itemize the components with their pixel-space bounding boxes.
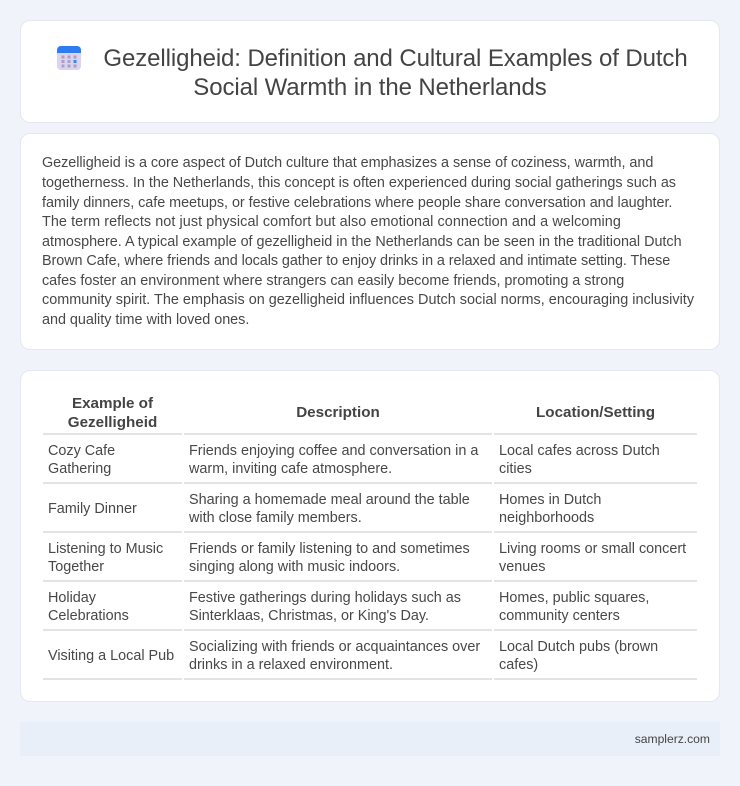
table content: drinks in a relaxed environment. xyxy=(189,657,393,673)
panel: intro paragraph xyxy=(20,133,720,350)
table content: venues xyxy=(499,559,545,575)
table content: warm, inviting cafe atmosphere. xyxy=(189,461,392,477)
table header xyxy=(68,395,655,431)
table content: Sinterklaas, Christmas, or King's Day. xyxy=(189,608,429,624)
table content: Together xyxy=(48,559,104,575)
table content: Homes, public squares, xyxy=(499,590,649,606)
paragraph text: and quality time with loved ones. xyxy=(42,312,249,328)
paragraph text xyxy=(42,155,694,328)
table content: Sharing a homemade meal around the table xyxy=(189,492,470,508)
footer bar xyxy=(20,722,720,756)
table content: Friends or family listening to and sometimes xyxy=(189,541,470,557)
title: Gezelligheid: Definition and Cultural Examples of Dutch xyxy=(103,45,688,72)
table content: Local cafes across Dutch xyxy=(499,443,660,459)
row: holiday celebrations xyxy=(48,590,649,624)
icon: calendar xyxy=(57,46,81,70)
row: family dinner xyxy=(48,492,601,526)
footer text: samplerz.com xyxy=(635,732,710,746)
table content: cafes) xyxy=(499,657,538,673)
table content: Socializing with friends or acquaintances over xyxy=(189,639,480,655)
paragraph text: togetherness. In the Netherlands, this concept is often experienced during social gatherings such as xyxy=(42,175,676,191)
row: local pub xyxy=(48,639,658,673)
panel: examples table xyxy=(20,370,720,702)
table content: Gathering xyxy=(48,461,111,477)
paragraph text: Brown Cafe, where friends and locals gather to enjoy drinks in a relaxed and intimate setting. These xyxy=(42,253,670,269)
paragraph text: cafes foster an environment where strangers can easily become friends, promoting a strong xyxy=(42,273,624,289)
table content: Family Dinner xyxy=(48,501,137,517)
paragraph text: atmosphere. A typical example of gezelligheid in the Netherlands can be seen in the traditional Dutch xyxy=(42,234,682,250)
table content: Holiday xyxy=(48,590,96,606)
table content: Location/Setting xyxy=(536,404,655,421)
table content: neighborhoods xyxy=(499,510,594,526)
table content: Friends enjoying coffee and conversation in a xyxy=(189,443,478,459)
table content: Gezelligheid xyxy=(68,414,157,431)
table content: Example of xyxy=(72,395,153,412)
table content: Festive gatherings during holidays such as xyxy=(189,590,461,606)
panel: header xyxy=(20,20,720,123)
row: cozy cafe xyxy=(48,443,660,477)
table content: Cozy Cafe xyxy=(48,443,115,459)
table content: Visiting a Local Pub xyxy=(48,648,174,664)
table content: Homes in Dutch xyxy=(499,492,601,508)
row: listening to music xyxy=(48,541,686,575)
paragraph text: family dinners, cafe meetups, or festive celebrations where people share conversation and laughter. xyxy=(42,195,672,211)
table content: Celebrations xyxy=(48,608,129,624)
table content: Description xyxy=(296,404,380,421)
paragraph text: community spirit. The emphasis on gezelligheid influences Dutch social norms, encouraging inclusivity xyxy=(42,292,694,308)
table content: community centers xyxy=(499,608,620,624)
table content: cities xyxy=(499,461,532,477)
paragraph text: The term reflects not just physical comfort but also emotional connection and a welcoming xyxy=(42,214,621,230)
table content: singing along with music indoors. xyxy=(189,559,400,575)
table content: Living rooms or small concert xyxy=(499,541,686,557)
paragraph text: Gezelligheid is a core aspect of Dutch culture that emphasizes a sense of coziness, warmth, and xyxy=(42,155,653,171)
title line 2: Social Warmth in the Netherlands xyxy=(193,74,547,101)
table content: Listening to Music xyxy=(48,541,163,557)
table content: with close family members. xyxy=(189,510,362,526)
table content: Local Dutch pubs (brown xyxy=(499,639,658,655)
